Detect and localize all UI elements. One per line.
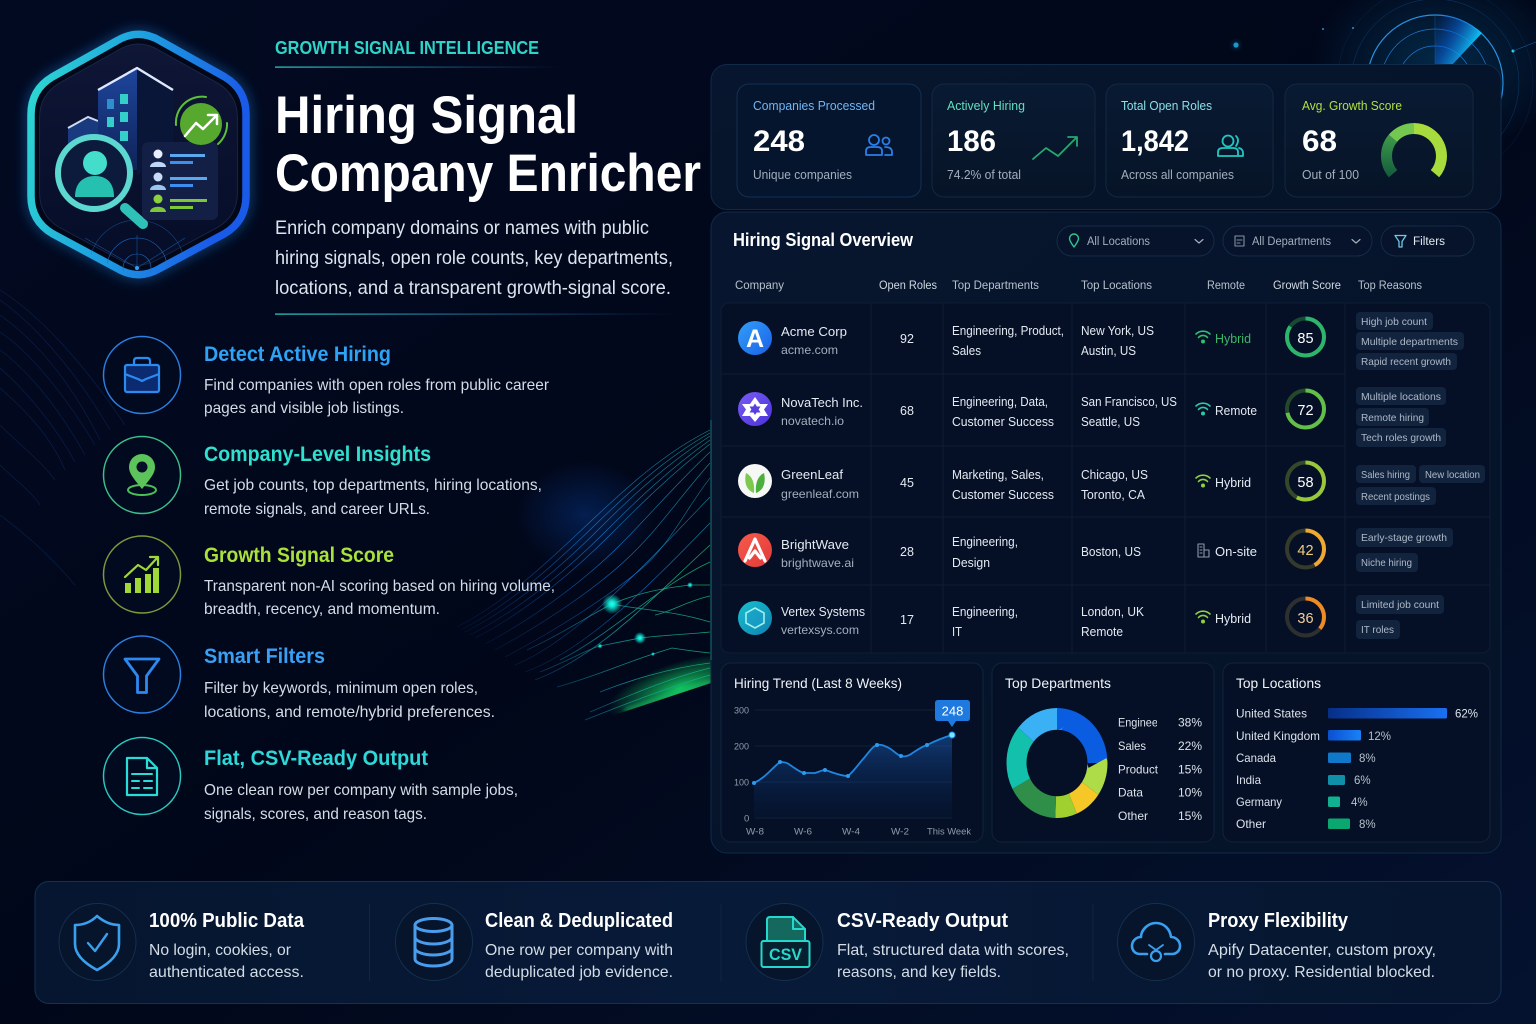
table header: Growth Score <box>1273 280 1341 292</box>
icon: document <box>104 738 180 814</box>
chart: hiring trend: 100 <box>734 778 749 788</box>
row: NovaTech Inc.: Remote <box>1215 404 1257 418</box>
row: Vertex Systems <box>738 595 1444 639</box>
row: NovaTech Inc. <box>738 387 1446 447</box>
chart: hiring trend: W-8 <box>746 826 764 838</box>
feature: detect active hiring: Find companies with open roles from public career <box>204 377 550 394</box>
reason tags: IT roles <box>1361 624 1394 636</box>
row: Vertex Systems: Remote <box>1081 625 1123 639</box>
row: BrightWave: BrightWave <box>781 538 849 552</box>
feature: growth signal score <box>104 536 555 618</box>
row: GreenLeaf: Marketing, Sales, <box>952 468 1044 482</box>
row: NovaTech Inc.: San Francisco, US <box>1081 395 1177 409</box>
icon: shield <box>59 904 136 980</box>
icon: csv file: CSV <box>769 946 802 964</box>
decoration: network wave <box>457 430 710 720</box>
chart: top locations: Top Locations <box>1236 675 1321 691</box>
card: average growth score <box>1285 84 1473 197</box>
logo: Vertex <box>738 601 772 635</box>
feature: detect active hiring: pages and visible job listings. <box>204 400 404 417</box>
card: average growth score: 68 <box>1302 125 1337 158</box>
row: Vertex Systems: Hybrid <box>1215 612 1251 626</box>
icon: briefcase <box>104 336 180 414</box>
row: Vertex Systems: Vertex Systems <box>781 605 865 619</box>
icon: database <box>396 904 472 980</box>
card: actively hiring: 186 <box>947 125 996 158</box>
score ring 42: 42 <box>1297 543 1314 559</box>
benefit: proxy flexibility: Apify Datacenter, custom proxy, <box>1208 942 1436 959</box>
feature: smart filters: locations, and remote/hybrid preferences. <box>204 704 495 721</box>
feature: flat csv-ready output <box>104 738 518 823</box>
panel: KPI cards <box>711 64 1501 210</box>
row: Acme Corp: 92 <box>900 332 914 346</box>
benefit: deduplicated: One row per company with <box>485 942 673 959</box>
feature: flat csv-ready output: One clean row per company with sample jobs, <box>204 782 518 799</box>
score ring 58 <box>1287 462 1324 500</box>
table header: Remote <box>1207 280 1245 292</box>
donut legend: 10% <box>1178 786 1202 800</box>
chart: hiring trend: 0 <box>744 814 749 824</box>
icon: wifi teal <box>1196 403 1210 415</box>
feature: growth signal score: Transparent non-AI scoring based on hiring volume, <box>204 578 555 595</box>
chart: top departments donut: Top Departments <box>1005 675 1111 691</box>
row: BrightWave <box>738 528 1453 572</box>
title: Hiring Signal <box>275 86 578 145</box>
reason tags: Remote hiring <box>1361 412 1424 424</box>
accent: panel edge <box>710 420 712 660</box>
icon: people teal <box>1218 136 1243 156</box>
feature: growth signal score: Growth Signal Score <box>204 544 394 567</box>
score ring 72: 72 <box>1297 403 1314 419</box>
chart: top locations: 62% <box>1455 708 1478 720</box>
score ring 42 <box>1287 530 1324 568</box>
score ring 58: 58 <box>1297 475 1314 491</box>
chart: top locations: 4% <box>1351 797 1368 809</box>
donut legend: Sales <box>1118 739 1146 753</box>
row: Vertex Systems: vertexsys.com <box>781 623 859 637</box>
chart: top locations: Canada <box>1236 751 1276 765</box>
reason tags <box>1356 312 1464 370</box>
icon: map pin <box>104 436 180 514</box>
table grid <box>721 303 1490 653</box>
feature: smart filters: Filter by keywords, minimum open roles, <box>204 680 478 697</box>
filter: all departments <box>1223 226 1372 256</box>
logo: BrightWave <box>738 533 772 567</box>
row: BrightWave: Boston, US <box>1081 545 1141 559</box>
icon: cloud <box>1118 904 1194 980</box>
benefit: public data: authenticated access. <box>149 964 304 981</box>
row: GreenLeaf: Customer Success <box>952 488 1054 502</box>
benefit: public data <box>59 904 305 981</box>
benefit: public data: No login, cookies, or <box>149 942 292 959</box>
donut legend: 22% <box>1178 739 1202 753</box>
card: actively hiring: Actively Hiring <box>947 99 1025 113</box>
icon: hexagon company badge <box>31 34 246 316</box>
gauge <box>1386 128 1441 174</box>
row: GreenLeaf: GreenLeaf <box>781 468 844 482</box>
eyebrow label: GROWTH SIGNAL INTELLIGENCE <box>275 38 539 58</box>
row: BrightWave: 28 <box>900 545 914 559</box>
score ring 36 <box>1287 598 1324 636</box>
table header: Top Departments <box>952 280 1039 292</box>
reason tags: High job count <box>1361 316 1427 328</box>
feature: smart filters: Smart Filters <box>204 645 325 668</box>
filter button <box>1381 226 1474 256</box>
chart: hiring trend: Hiring Trend (Last 8 Weeks) <box>734 675 902 691</box>
decoration: left contour lines <box>0 290 125 585</box>
reason tags: Sales hiring <box>1361 469 1410 481</box>
chart: hiring trend: W-4 <box>842 826 860 838</box>
row: BrightWave: brightwave.ai <box>781 556 854 570</box>
feature: flat csv-ready output: signals, scores, and reason tags. <box>204 806 427 823</box>
icon: office building <box>1198 544 1209 557</box>
card: total open roles <box>1106 84 1273 197</box>
title: Company Enricher <box>275 144 701 203</box>
chart: hiring trend: W-2 <box>891 826 909 838</box>
card: companies processed: Companies Processed <box>753 99 875 113</box>
icon: csv file <box>746 904 823 980</box>
benefit: public data: 100% Public Data <box>149 910 305 932</box>
chart: hiring trend: W-6 <box>794 826 812 838</box>
benefit: csv-ready <box>746 904 1069 981</box>
feature: detect active hiring: Detect Active Hiring <box>204 343 391 366</box>
feature: company-level insights <box>104 436 542 518</box>
row: Acme Corp <box>738 312 1464 370</box>
reason tags: Early-stage growth <box>1361 532 1447 544</box>
intro text: Enrich company domains or names with public <box>275 217 649 239</box>
chart: top locations: 12% <box>1368 731 1391 743</box>
benefit: csv-ready: Flat, structured data with scores, <box>837 942 1069 959</box>
donut legend: Engineering <box>1118 716 1176 730</box>
card: total open roles: 1,842 <box>1121 125 1189 158</box>
row: Acme Corp: Engineering, Product, <box>952 324 1064 338</box>
donut legend: Product <box>1118 762 1159 776</box>
donut legend: 38% <box>1178 716 1202 730</box>
card: companies processed: 248 <box>753 125 805 158</box>
intro text: locations, and a transparent growth-signal score. <box>275 277 671 299</box>
donut legend: Other <box>1118 809 1148 823</box>
card: average growth score: Avg. Growth Score <box>1302 99 1402 113</box>
reason tags: Recent postings <box>1361 491 1430 503</box>
row: Vertex Systems: Engineering, <box>952 605 1018 619</box>
icon: wifi lime <box>1196 611 1210 623</box>
benefit: deduplicated <box>396 904 673 981</box>
table header: Open Roles <box>879 280 937 292</box>
chart: top locations: Germany <box>1236 795 1282 809</box>
icon: wifi lime <box>1196 475 1210 487</box>
card: companies processed: Unique companies <box>753 168 852 182</box>
tooltip: 248: 248 <box>942 704 963 718</box>
donut legend: Data <box>1118 786 1143 800</box>
donut legend <box>1118 716 1202 823</box>
card: companies processed <box>737 84 921 197</box>
row: NovaTech Inc.: Seattle, US <box>1081 415 1140 429</box>
chart: top locations: 8% <box>1359 819 1376 831</box>
reason tags: New location <box>1425 469 1480 481</box>
chart: top locations: Other <box>1236 817 1266 831</box>
reason tags: Multiple departments <box>1361 336 1458 348</box>
reason tags: Multiple locations <box>1361 391 1441 403</box>
chart: hiring trend: 200 <box>734 742 749 752</box>
panel: hiring signal overview <box>711 212 1501 853</box>
chart: hiring trend: This Week <box>927 826 971 838</box>
chart: top locations: 8% <box>1359 753 1376 765</box>
row: GreenLeaf: Chicago, US <box>1081 468 1148 482</box>
row: GreenLeaf: 45 <box>900 476 914 490</box>
chart: hiring trend: 300 <box>734 706 749 716</box>
score ring 85: 85 <box>1297 331 1314 347</box>
card: average growth score: Out of 100 <box>1302 168 1359 182</box>
row: NovaTech Inc.: NovaTech Inc. <box>781 396 863 410</box>
benefit: proxy flexibility: or no proxy. Residential blocked. <box>1208 964 1435 981</box>
feature: flat csv-ready output: Flat, CSV-Ready Output <box>204 747 428 770</box>
donut legend: 15% <box>1178 762 1202 776</box>
heading: Hiring Signal Overview <box>733 230 914 250</box>
reason tags <box>1356 595 1444 639</box>
chart: top locations: 6% <box>1354 775 1371 787</box>
benefit: csv-ready: reasons, and key fields. <box>837 964 1001 981</box>
reason tags <box>1356 387 1446 447</box>
filter button: Filters <box>1413 236 1445 248</box>
row: GreenLeaf: Hybrid <box>1215 476 1251 490</box>
row: Acme Corp: Sales <box>952 344 981 358</box>
intro text <box>275 217 675 315</box>
icon: wifi green <box>1196 331 1210 343</box>
reason tags: Tech roles growth <box>1361 432 1441 444</box>
feature: detect active hiring <box>104 336 550 417</box>
benefit: deduplicated: Clean & Deduplicated <box>485 910 673 932</box>
logo: Acme: A <box>746 325 764 353</box>
icon: trend arrow <box>1033 137 1077 159</box>
feature: company-level insights: Company-Level Insights <box>204 443 431 466</box>
row: NovaTech Inc.: Customer Success <box>952 415 1054 429</box>
row: NovaTech Inc.: Engineering, Data, <box>952 395 1048 409</box>
table header: Company <box>735 280 784 292</box>
decoration: top-right radar <box>1229 0 1536 181</box>
row: GreenLeaf: greenleaf.com <box>781 487 859 501</box>
benefit: proxy flexibility <box>1118 904 1436 981</box>
feature: company-level insights: Get job counts, top departments, hiring locations, <box>204 477 542 494</box>
reason tags <box>1356 465 1485 505</box>
row: Vertex Systems: London, UK <box>1081 605 1145 619</box>
benefit: proxy flexibility: Proxy Flexibility <box>1208 910 1349 932</box>
row: NovaTech Inc.: 68 <box>900 404 914 418</box>
card: total open roles: Total Open Roles <box>1121 99 1212 113</box>
panel: bottom benefits band <box>35 882 1501 1004</box>
chart: top locations: United Kingdom <box>1236 729 1320 743</box>
feature: company-level insights: remote signals, and career URLs. <box>204 501 430 518</box>
score ring 85 <box>1287 318 1324 356</box>
row: Vertex Systems: IT <box>952 625 962 639</box>
donut <box>1016 719 1098 807</box>
row: GreenLeaf: Toronto, CA <box>1081 488 1146 502</box>
filter: all departments: All Departments <box>1252 236 1331 248</box>
feature: growth signal score: breadth, recency, and momentum. <box>204 601 440 618</box>
row: Acme Corp: Austin, US <box>1081 344 1136 358</box>
reason tags <box>1356 528 1453 572</box>
table header: Top Locations <box>1081 280 1152 292</box>
filter: all locations: All Locations <box>1087 236 1150 248</box>
icon: funnel <box>104 636 180 713</box>
row: BrightWave: Engineering, <box>952 535 1018 549</box>
score ring 36: 36 <box>1297 611 1314 627</box>
tooltip: 248 <box>935 700 970 727</box>
row: Acme Corp: Acme Corp <box>781 325 847 339</box>
reason tags: Limited job count <box>1361 599 1439 611</box>
card: total open roles: Across all companies <box>1121 168 1234 182</box>
chart: top locations: India <box>1236 773 1261 787</box>
row: BrightWave: Design <box>952 556 990 570</box>
icon: growth bars <box>104 536 180 613</box>
chart: top locations <box>1223 663 1490 842</box>
intro text: hiring signals, open role counts, key departments, <box>275 247 673 269</box>
benefit: csv-ready: CSV-Ready Output <box>837 910 1008 932</box>
chart: top locations: United States <box>1236 706 1307 720</box>
chart: hiring trend <box>721 663 983 842</box>
row: NovaTech Inc.: novatech.io <box>781 414 844 428</box>
feature: smart filters <box>104 636 495 721</box>
logo: NovaTech <box>738 392 772 426</box>
benefit: deduplicated: deduplicated job evidence. <box>485 964 673 981</box>
row: BrightWave: On-site <box>1215 545 1257 559</box>
card: actively hiring: 74.2% of total <box>947 168 1021 182</box>
title <box>275 86 701 203</box>
card: actively hiring <box>932 84 1095 197</box>
score ring 72 <box>1287 390 1324 428</box>
row: Vertex Systems: 17 <box>900 613 914 627</box>
chart: top departments donut <box>992 663 1214 842</box>
table header <box>735 280 1422 292</box>
icon: people <box>866 135 892 155</box>
reason tags: Rapid recent growth <box>1361 356 1451 368</box>
row: Acme Corp: acme.com <box>781 343 838 357</box>
logo: GreenLeaf <box>738 464 772 498</box>
row: GreenLeaf <box>738 462 1485 505</box>
filter: all locations <box>1057 226 1214 256</box>
row: Acme Corp: New York, US <box>1081 324 1154 338</box>
table header: Top Reasons <box>1358 280 1422 292</box>
donut legend: 15% <box>1178 809 1202 823</box>
row: Acme Corp: Hybrid <box>1215 332 1251 346</box>
reason tags: Niche hiring <box>1361 557 1412 569</box>
logo: Acme <box>738 321 772 355</box>
